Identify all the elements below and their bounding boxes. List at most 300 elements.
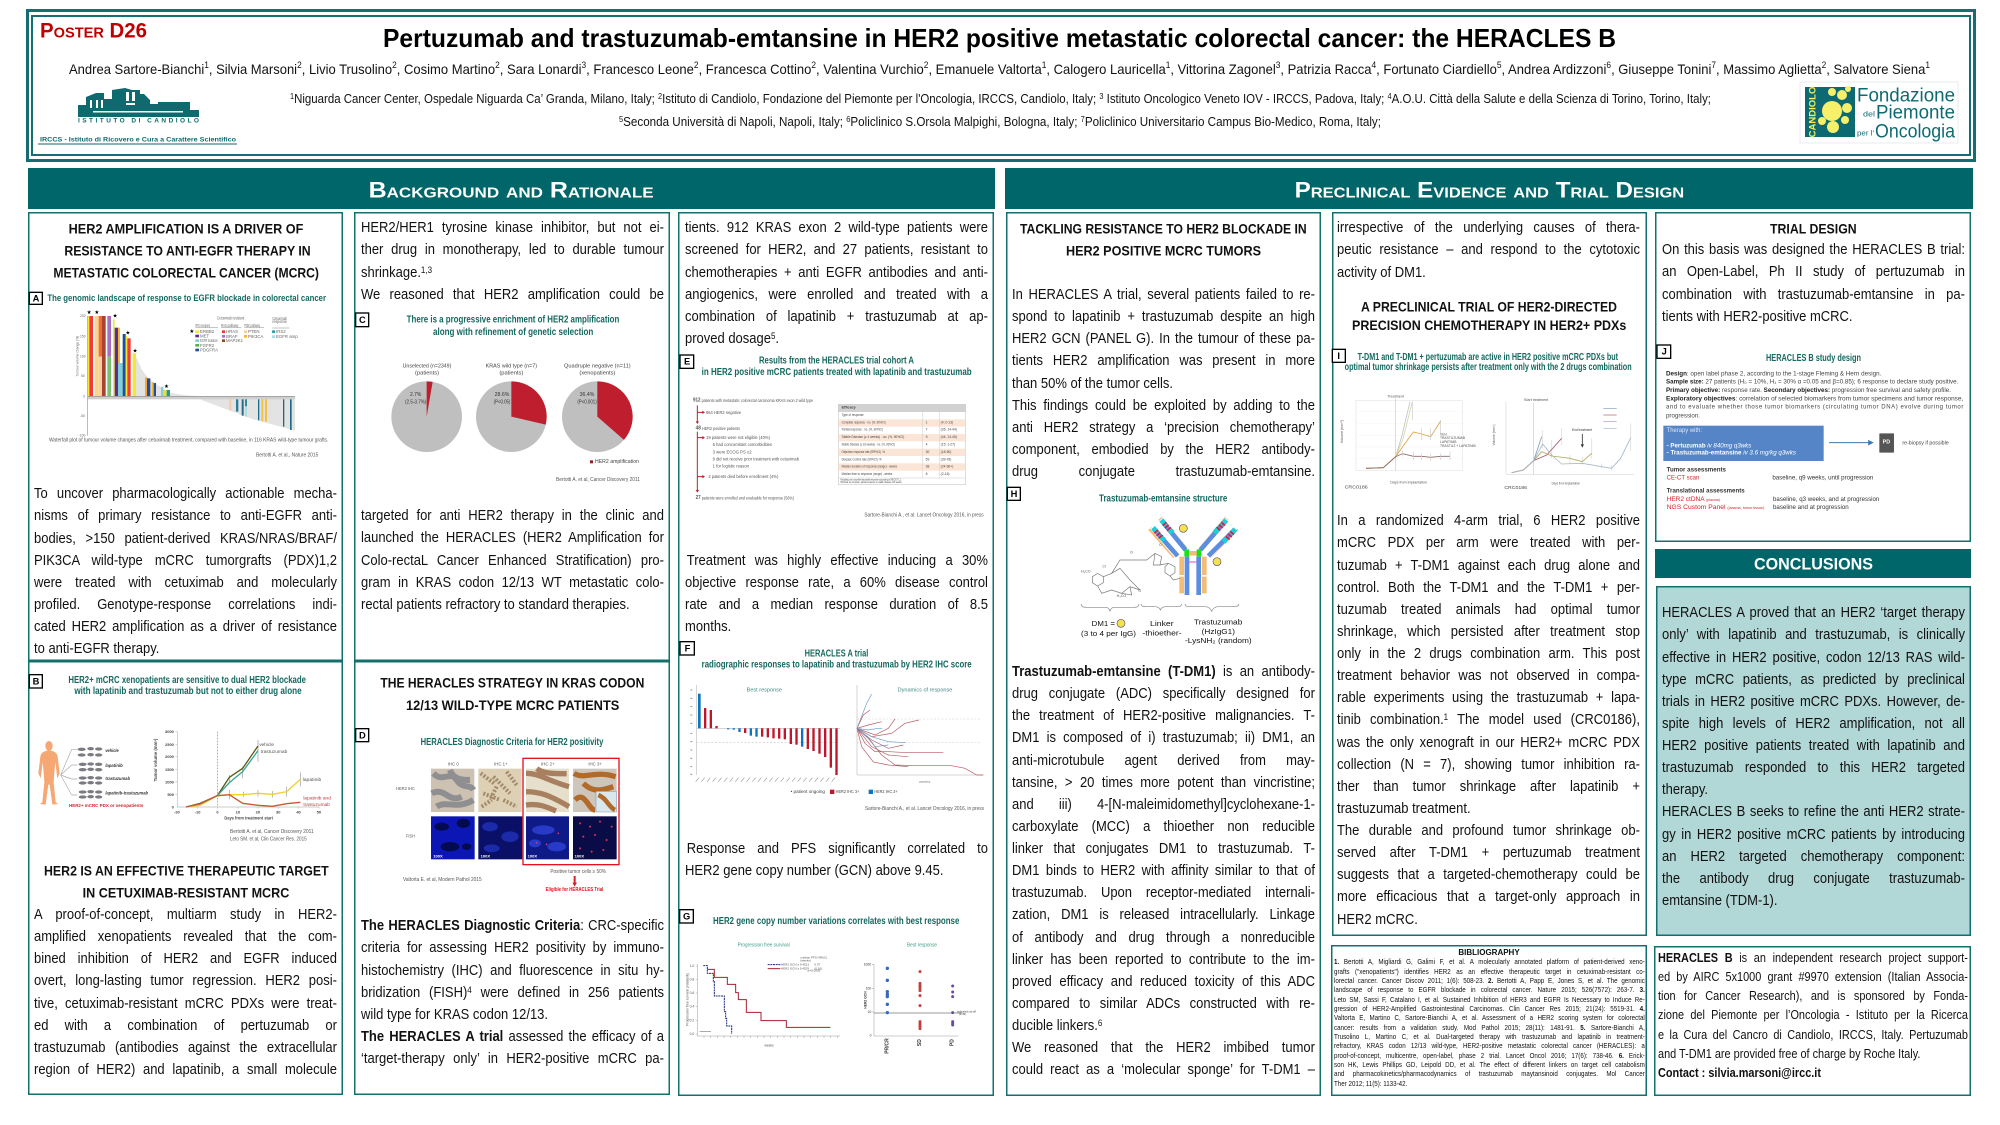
body text: profiled. Genotype-response correlations indi- [34, 597, 337, 613]
body text: spond to lapatinib + trastuzumab despite an high [1012, 309, 1315, 325]
body text: ther than tumor shrinkage after lapatinib + [1337, 779, 1640, 795]
body text: bined inhibition of HER2 and EGFR induced [34, 951, 337, 967]
line chart B: 2500 [165, 742, 175, 747]
caption B [68, 675, 306, 697]
legend: PTEN [248, 329, 260, 334]
section bar: Background and Rationale [28, 168, 995, 209]
conclusions text: gy in HER2 positive mCRC patients by introducing [1662, 827, 1965, 843]
funding text: and T-DM1 are provided free of charge by Roche Italy. [1658, 1046, 1920, 1061]
body text [1012, 664, 1315, 1078]
body text: to anti-EGFR therapy. [34, 641, 159, 657]
efficacy table: (24-90+) [941, 465, 953, 469]
authors: , Giuseppe Tonini [1611, 61, 1711, 77]
survival curve: 0.37 [814, 963, 821, 967]
flow diagram: 1 for logistic reason [713, 464, 750, 468]
re-biopsy note: re-biopsy if possible [1902, 440, 1949, 446]
body text: trastuzumab. Upon receptor-mediated internali- [1012, 885, 1315, 901]
affiliations [290, 92, 1711, 129]
figure A: waterfall plot [28, 292, 328, 459]
authors: 5 [1497, 60, 1502, 70]
body text: anti-microtubule agent derived from may- [1012, 752, 1315, 768]
scatter plot: HER2 GCN [864, 991, 868, 1009]
body text: activity of DM1. [1337, 265, 1426, 281]
heading: THE HERACLES STRATEGY IN KRAS CODON [380, 675, 644, 691]
flow diagram: 27 patients were enrolled and evaluable for response (56%) [696, 495, 794, 501]
line chart B: 10 [236, 810, 241, 814]
design description: Sample size: 27 patients (H₀ = 10%, H₁ = 30% α =0.05 and β=0.85); 6 response to declare study positive. [1666, 380, 1959, 386]
legend: ERBB2 [200, 329, 215, 334]
body text: ed with a combination of pertuzumab or [34, 1018, 337, 1034]
figure E: trial flow and efficacy table [679, 354, 984, 519]
column and row labels: FISH [406, 834, 415, 838]
panel: HER2 effective therapeutic target [28, 661, 343, 1095]
affiliations: Policlinico S.Orsola Malpighi, Bologna, Italy; [850, 115, 1081, 129]
authors: , Calogero Lauricella [1046, 61, 1166, 77]
legend F: HER2 IHC 3+ [836, 789, 860, 794]
design description: and to evaluate whether those tumor biomarkers (circulating tumor DNA) evolve during tumor [1666, 405, 1963, 411]
caption I: optimal tumor shrinkage persists after treatment only with the 2 drugs combination [1345, 362, 1632, 373]
legend: HER2 amplification [595, 459, 639, 465]
pie: quadruple negative: Quadruple negative (n=11) [564, 363, 631, 369]
column and row labels [396, 762, 602, 838]
affiliations: 2 [658, 92, 663, 100]
authors: 2 [297, 60, 302, 70]
affiliations: A.O.U. Città della Salute e della Scienza di Torino, Torino, Italy; [1392, 92, 1711, 106]
efficacy table: *Including one unconfirmed partial response according to RECIST 1.1. [840, 478, 902, 482]
pie: unselected: 2.7% [410, 392, 422, 398]
body text [361, 508, 664, 613]
legend: Cetuximab [272, 316, 287, 321]
body text: drug conjugate trastuzumab-emtansine. [1012, 464, 1315, 480]
icon: human body [38, 741, 60, 805]
authors: , Francesco Leone [586, 61, 694, 77]
label G: G [683, 911, 690, 921]
conclusions text: an HER2 targeted chemotherapy component: [1662, 849, 1965, 865]
scatter plot: 1000 [864, 963, 871, 967]
caption B: with lapatinib and trastuzumab but not to either drug alone [74, 686, 302, 697]
assessments: Tumor assessments [1667, 467, 1727, 473]
citation E: Sartore-Bianchi A., et al. Lancet Oncology 2016, in press [864, 513, 984, 519]
column and row labels: IHC 3+ [588, 762, 602, 766]
axis labels: Tumour volume change (%) [75, 336, 79, 377]
legend: PIK3CA [248, 334, 264, 339]
body text: trastuzumab (antibodies against the extracellular [34, 1040, 337, 1056]
body text: DM1 binds to HER2 with affinity similar to that of [1012, 863, 1315, 879]
figure J: study design [1656, 344, 1964, 511]
stars: ★ [125, 330, 130, 336]
pie: KRAS wild type: (patients) [499, 371, 523, 377]
DM1 linker chemical structure: O [1159, 543, 1162, 547]
caption G: HER2 gene copy number variations correlates with best response [713, 916, 960, 927]
legend [189, 316, 298, 352]
body text: objective response rate, a 60% disease control [685, 575, 988, 591]
body text: ther drug in monotherapy, led to durable tumour [361, 242, 664, 258]
body text: and iii) 4-[N-maleimidomethyl]cyclohexane-1- [1012, 797, 1315, 813]
legend: RAS pathway [221, 323, 239, 328]
funding text: HERACLES B is an independent research project support- [1658, 950, 1968, 965]
panel: HER2 tyrosine kinase and pie charts [354, 212, 670, 661]
figure B: xenopatients response [28, 674, 331, 843]
body text: could react as a ‘molecular sponge’ for T-DM1 – [1012, 1062, 1315, 1078]
body text: HER2 mCRC. [1337, 912, 1418, 928]
body text: bridization (FISH)4 were defined in 256 patients [361, 985, 664, 1001]
FISH micrographs: 100X [481, 854, 490, 858]
legend: RTK receptors [195, 323, 210, 328]
body text: was the only xenograft in our HER2+ mCRC PDX [1337, 735, 1640, 751]
figure note: Waterfall plot of tumour volume changes after cetuximab treatment, compared with baseline, in 116 KRAS wild-type tumour grafts. [49, 438, 328, 444]
arms of mice [61, 747, 148, 808]
body text: irrespective of the underlying causes of thera- [1337, 220, 1640, 236]
left growth chart: LAPATINIB [1440, 440, 1457, 444]
legend: FGFR2 [200, 343, 215, 348]
citations B: Leto SM. et al, Clin Cancer Res. 2015 [230, 837, 307, 843]
body text: HER2/HER1 tyrosine kinase inhibitor, but not ei- [361, 220, 664, 236]
efficacy table: Median time to response (range) - weeks [842, 472, 893, 476]
DM1 linker chemical structure: O [1138, 589, 1141, 593]
antibody diagram [1150, 518, 1237, 595]
authors: , Massimo Aglietta [1716, 61, 1822, 77]
efficacy table: 1 [926, 420, 928, 424]
body text: were treated with cetuximab and molecularly [34, 575, 337, 591]
line chart B: 500 [167, 792, 175, 797]
flow diagram: 9 did not receive prior treatment with cetuximab [713, 456, 800, 462]
body text: an Open-Label, Ph II study of pertuzumab in [1662, 264, 1965, 280]
survival curve: p=0.0005 [808, 969, 821, 973]
figure D: diagnostic criteria [355, 728, 620, 893]
authors: , Andrea Ardizzoni [1502, 61, 1606, 77]
label D: D [359, 730, 366, 740]
line chart B: 0 [216, 810, 219, 814]
right growth chart: Volume (mm³) [1492, 425, 1496, 445]
stars: ★ [113, 314, 118, 320]
design description: Design: open label phase 2, according to the 1-stage Fleming & Hern design. [1666, 371, 1882, 377]
scatter plot: PR/CR [884, 1038, 890, 1054]
eligibility box [523, 758, 619, 865]
funding text: e la Cura del Cancro di Candiolo, IRCCS, Italy. Pertuzumab [1658, 1026, 1968, 1042]
assessments: baseline and at progression [1773, 505, 1849, 511]
arms of mice: vehicle [105, 748, 119, 753]
references: 1. Bertotti A, Migliardi G, Galimi F, et al. A molecularly annotated platform of patient-derived xeno- [1334, 957, 1645, 966]
conclusions text: therapy. [1662, 782, 1708, 798]
eligibility note and arrow [546, 869, 606, 893]
label J [1657, 345, 1671, 358]
body text: peutic resistance – and respond to the cytotoxic [1337, 242, 1640, 258]
line chart B: Days from treatment start [224, 816, 274, 820]
panel: tackling resistance [1006, 212, 1321, 1096]
efficacy table: 38 [926, 465, 930, 469]
figure I: PDX tumor growth [1332, 348, 1634, 490]
structure labels: -LysNH₂ (random) [1185, 636, 1252, 645]
axis labels: -50 [80, 414, 85, 418]
panel: trial design [1655, 212, 1971, 542]
citations B [230, 829, 314, 843]
heading [44, 863, 329, 900]
legend: response [272, 319, 287, 324]
label F [680, 642, 694, 655]
heading [1020, 220, 1307, 258]
structure labels: (HzIgG1) [1202, 627, 1235, 636]
therapy box: - Pertuzumab iv 840mg q3wks [1667, 442, 1752, 449]
structure labels: DM1 = [1092, 619, 1115, 628]
caption A: The genomic landscape of response to EGFR blockade in colorectal cancer [47, 293, 326, 303]
body text: On this basis was designed the HERACLES B trial: [1662, 242, 1965, 258]
efficacy table: (4; 0-13) [941, 420, 953, 424]
references: Leto SM, Sassi F, Catalano I, et al. Sustained Inhibition of HER3 and EGFR Is Necessary to Induce Re- [1334, 995, 1645, 1004]
line chart B: 1000 [165, 780, 175, 784]
assessments: CE-CT scan [1667, 475, 1699, 481]
heading: METASTATIC COLORECTAL CANCER (MCRC) [53, 265, 319, 281]
heading: TRIAL DESIGN [1770, 220, 1857, 236]
body text: tients with HER2-positive mCRC. [1662, 309, 1853, 325]
affiliations: Niguarda Cancer Center, Ospedale Niguarda Ca’ Granda, Milano, Italy; [294, 92, 658, 106]
efficacy table: (44; 13-45) [941, 435, 957, 439]
body text: HER2 GCN (PANEL G). In the tumour of these pa- [1012, 331, 1315, 347]
references: landscape of response to EGFR blockade in colorectal cancer. Nature 2015; 526(7572): 263-7. 3. [1334, 985, 1645, 994]
survival curve: HER2 GCN ≥ 9.45 [781, 963, 806, 967]
body text: angiogenics, were enrolled and treated with a [685, 287, 988, 303]
references: Trusolino L, Martino C, et al. Dual-targeted therapy with trastuzumab and lapatinib in treatment- [1334, 1032, 1645, 1041]
therapy box: - Trastuzumab-emtansine iv 3.6 mg/kg q3wks [1667, 449, 1797, 456]
heading: HER2 POSITIVE MCRC TUMORS [1066, 242, 1261, 258]
line chart B: -10 [195, 810, 201, 814]
conclusions text: trials in HER2 positive mCRC PDXs. However, de- [1662, 694, 1965, 710]
flow diagram: 48 HER2 positive patients [696, 425, 740, 431]
label F: F [685, 643, 691, 653]
line chart B: -20 [174, 810, 181, 814]
body text: chemotherapies + anti EGFR antibodies and anti- [685, 265, 988, 281]
stars: ★ [87, 310, 92, 316]
design description [1666, 371, 1964, 419]
right growth chart: CRC0186 [1504, 485, 1527, 490]
efficacy table: Partial response - no. (%, 90%CI) [842, 428, 883, 432]
body text: drug conjugate (ADC) specifically designed for [1012, 686, 1315, 702]
line chart B: trastuzumab [261, 749, 288, 754]
body text: shrinkage, which persisted after treatment stop [1337, 624, 1640, 640]
label G [680, 910, 693, 923]
section bar: Preclinical Evidence and Trial Design [1005, 168, 1973, 209]
references: proof-of-concept, multicentre, open-label, phase 2 trial. Lancet Oncol 2016; 17(6): 738-46. 6. Erick- [1334, 1051, 1645, 1060]
label D [356, 729, 369, 742]
arrow to PD [1829, 441, 1873, 445]
conclusions text: HERACLES A proved that an HER2 ‘target therapy [1662, 605, 1965, 621]
survival curve [686, 942, 840, 1047]
efficacy table: 8 [926, 472, 928, 476]
authors: 1 [1166, 60, 1170, 70]
survival curve: 0.8 [690, 977, 694, 981]
body text: The durable and profound tumor shrinkage ob- [1337, 823, 1640, 839]
funding text: zione del Piemonte per l’Oncologia - Istituto per la Ricerca [1658, 1007, 1968, 1022]
conclusions heading bar: CONCLUSIONS [1754, 554, 1873, 574]
efficacy table: (18-50) [941, 450, 951, 454]
body text: region of HER2) and lapatinib, a small molecule [34, 1062, 337, 1078]
caption C [407, 314, 619, 338]
survival curve: (0.16) [814, 967, 822, 971]
body text: shrinkage.1,3 [361, 265, 432, 281]
scatter plot [864, 942, 976, 1054]
body text [1012, 287, 1315, 480]
right growth chart: Start treatment [1524, 398, 1548, 402]
stars: ★ [164, 384, 169, 390]
FISH micrographs: 100X [575, 854, 584, 858]
body text: cated HER2 amplification as a driver of resistance [34, 619, 337, 635]
body text: treatment behavior was not observed in compa- [1337, 668, 1640, 684]
efficacy table: 30 [926, 450, 930, 454]
structure labels: -thioether- [1142, 628, 1182, 638]
braces [1081, 604, 1239, 611]
caption E: Results from the HERACLES trial cohort A [759, 356, 914, 366]
assessments [1667, 467, 1879, 511]
panel: HER2 amplification driver of resistance [28, 212, 343, 661]
body text: Response and PFS significantly correlated to [687, 841, 988, 857]
stars: ★ [94, 310, 99, 316]
authors: , Silvia Marsoni [209, 61, 297, 77]
FISH micrographs [431, 816, 617, 859]
panel: HERACLES strategy [354, 661, 670, 1095]
efficacy table: Complete response - no. (%, 90%CI) [842, 420, 886, 424]
flow diagram: 6 had concomitant comorbidities [713, 442, 772, 447]
caption F [702, 648, 972, 670]
body text: zation, DM1 is released intracellularly. Linkage [1012, 907, 1315, 923]
right growth chart: End treatment [1572, 428, 1592, 432]
body text: We reasoned that the HER2 imbibed tumor [1012, 1040, 1315, 1056]
axis labels: 0 [83, 394, 85, 398]
authors: 2 [495, 60, 500, 70]
scatter plot: PD [950, 1039, 956, 1046]
efficacy table: (15; 1-27) [941, 442, 955, 446]
left growth chart: TRASTUZ + LAPATINIB [1440, 444, 1476, 448]
heading: HER2 IS AN EFFECTIVE THERAPEUTIC TARGET [44, 863, 329, 879]
authors: , Vittorina Zagonel [1170, 61, 1276, 77]
caption C: along with refinement of genetic selection [433, 327, 593, 338]
line chart B: 3000 [165, 729, 175, 734]
design description: Exploratory objectives : correlation of selected biomarkers from tumor specimens and tumor response, [1666, 396, 1964, 402]
caption B: HER2+ mCRC xenopatients are sensitive to dual HER2 blockade [68, 675, 306, 686]
authors: , Cosimo Martino [397, 61, 495, 77]
arms of mice: lapatinib [105, 763, 123, 768]
line chart B: 0 [172, 804, 175, 810]
panel: bibliography [1331, 945, 1647, 1096]
authors: 1 [204, 60, 209, 70]
scatter plot: 0 [870, 1034, 872, 1038]
body text: histochemistry (IHC) and fluorescence in situ hy- [361, 963, 664, 979]
caption D: HERACLES Diagnostic Criteria for HER2 positivity [421, 737, 604, 748]
body text: HER2 gene copy number (GCN) above 9.45. [685, 863, 943, 879]
label C: C [359, 315, 366, 325]
funding text: tion for Cancer Research), and is sponsored by Fonda- [1658, 988, 1968, 1003]
legend: HRAS [226, 329, 238, 334]
heading: HER2 AMPLIFICATION IS A DRIVER OF [69, 220, 304, 236]
body text: screened for HER2, and 27 patients, resistant to [685, 242, 988, 258]
logo: Fondazione del Piemonte per l'Oncologia: del [1863, 112, 1876, 118]
scatter plot: Best response [907, 942, 937, 948]
authors: 3 [582, 60, 586, 70]
assessments: HER2 ctDNA (plasma) [1667, 497, 1720, 503]
body text: compared to similar ADCs constructed with re- [1012, 996, 1315, 1012]
body text: anti HER2 strategy a ‘precision chemotherapy’ [1012, 420, 1315, 436]
pie: quadruple negative: 36.4% [580, 392, 595, 398]
logo: Istituto di Candiolo: IRCCS - Istituto di Ricovero e Cura a Carattere Scientifico [40, 136, 236, 144]
heading [53, 220, 319, 281]
pie: KRAS wild type [476, 363, 547, 452]
scatter plot: SD [917, 1039, 923, 1046]
body text: bodies, >150 patient-derived KRAS/NRAS/BRAF/ [34, 531, 337, 547]
axis labels: 50 [81, 374, 85, 378]
body text: component, embodied by the HER2 antibody- [1012, 442, 1315, 458]
caption F: HERACLES A trial [805, 648, 868, 660]
DM1 linker chemical structure: O [1130, 551, 1133, 555]
caption I: T-DM1 and T-DM1 + pertuzumab are active in HER2 positive mCRC PDXs but [1358, 352, 1618, 363]
line chart B: vehicle [259, 742, 274, 747]
authors: Andrea Sartore-Bianchi [69, 61, 215, 77]
body text [34, 486, 337, 657]
body text: served after T-DM1 + pertuzumab treatment [1337, 845, 1640, 861]
efficacy table: 9 [926, 435, 928, 439]
figure C: pie charts [355, 312, 640, 483]
FISH micrographs: 100X [433, 854, 443, 858]
survival curve: Progression free survival [738, 942, 790, 948]
left growth chart: Treatment [1387, 395, 1404, 399]
body text: mCRC PDX per arm were treated with per- [1337, 535, 1640, 551]
column and row labels: IHC 2+ [541, 762, 555, 766]
body text: suggests that a targeted-chemotherapy could be [1337, 867, 1640, 883]
legend F: • patient ongoing [791, 789, 825, 794]
axis labels: 150 [80, 334, 86, 338]
body text [1337, 513, 1640, 928]
left growth chart: CRC0186 [1345, 484, 1368, 490]
survival curve: 0.4 [690, 1005, 694, 1009]
authors: 2 [1822, 60, 1826, 70]
body text: collection (N = 7), showing tumor inhibition ra- [1337, 757, 1640, 773]
body text: than 50% of the tumor cells. [1012, 376, 1173, 392]
caption C: There is a progressive enrichment of HER2 amplification [407, 314, 619, 326]
body text: Trastuzumab-emtansine (T-DM1) is an antibody- [1012, 664, 1315, 680]
citations B: Bertotti A. et al, Cancer Discovery 2011 [230, 829, 314, 835]
spider chart: dynamics of response: weeks [919, 779, 930, 784]
body text: To uncover pharmacologically actionable mecha- [34, 486, 337, 502]
pie: unselected [391, 363, 462, 452]
label B [29, 675, 42, 688]
conclusions text: the antibody drug conjugate trastuzumab- [1662, 871, 1965, 887]
body text: tinib combination.1 The model used (CRC0186), [1337, 712, 1640, 728]
assessments: baseline, q9 weeks, until progression [1772, 475, 1873, 481]
left growth chart: VEH [1440, 432, 1447, 436]
efficacy table: Type of response [842, 413, 864, 417]
body text: rectal patients refractory to standard therapies. [361, 597, 630, 613]
references: lorectal cancer. Cancer Discov 2011; 1(6): 508-23. 2. Bertotti A, Papp E, Jones S, et al. The genomic [1334, 976, 1645, 985]
line chart B: lapatinib and [303, 796, 331, 800]
pie: KRAS wild type: 28.6% [495, 392, 510, 398]
structure labels: (3 to 4 per IgG) [1081, 629, 1136, 638]
references: cancer: results from a validation study. Mod Pathol 2015; 28(11): 1481-91. 5. Sartore-Bianchi A, [1334, 1023, 1645, 1032]
body text: gram in KRAS codon 12/13 WT metastatic colo- [361, 575, 664, 591]
panel: conclusions [1656, 586, 1971, 936]
efficacy table [838, 404, 966, 485]
citation C: Bertotti A. et al, Cancer Discovery 2011 [556, 477, 640, 483]
body text: tients. 912 KRAS exon 2 wild-type patients were [685, 220, 988, 236]
heading: TACKLING RESISTANCE TO HER2 BLOCKADE IN [1020, 220, 1307, 236]
logo: Fondazione del Piemonte per l'Oncologia: per l' [1857, 130, 1874, 138]
pie: quadruple negative [562, 363, 633, 452]
conclusions heading bar [1655, 549, 1971, 578]
efficacy table: Stable Disease (≥ 4 weeks) - no. (%, 90%CI) [842, 435, 904, 439]
label J: J [1662, 347, 1667, 357]
legend: MET [200, 334, 209, 338]
authors: 1 [1042, 60, 1046, 70]
body text: wild type for KRAS codon 12/13. [361, 1007, 548, 1023]
survival curve: Progression free survival probability [686, 973, 690, 1026]
structure labels [1081, 618, 1252, 645]
axis labels: -100 [79, 434, 85, 438]
